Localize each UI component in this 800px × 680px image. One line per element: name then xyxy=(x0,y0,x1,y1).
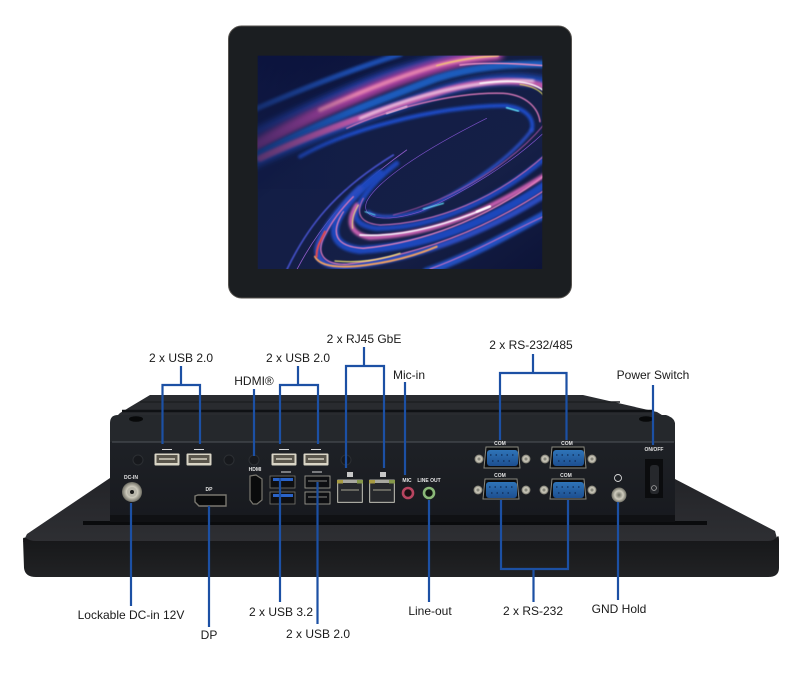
callout: USB 3.2: 2 x USB 3.2 xyxy=(249,605,313,619)
callout: Power Switch xyxy=(617,368,689,445)
callout: RJ45 xyxy=(327,332,401,468)
callout: HDMI xyxy=(234,374,274,456)
chassis recess left xyxy=(129,416,143,422)
tiny silkscreen labels: DP xyxy=(206,487,213,493)
chassis ridge xyxy=(122,410,652,412)
port: RJ45 A xyxy=(337,480,363,503)
chassis front face xyxy=(110,442,675,516)
callout: RS-232: 2 x RS-232 xyxy=(503,604,563,618)
callout: Mic-in: Mic-in xyxy=(393,368,425,382)
callout: GND Hold: GND Hold xyxy=(592,602,646,616)
callout: 2 x USB 2.0 left: 2 x USB 2.0 xyxy=(149,351,213,365)
callout: Line-out xyxy=(408,500,452,618)
tiny silkscreen labels: HDMI xyxy=(249,467,262,473)
callout: RJ45: 2 x RJ45 GbE xyxy=(327,332,401,346)
chassis upper face xyxy=(110,415,675,442)
tiny silkscreen labels xyxy=(124,441,663,493)
tiny silkscreen labels: COM xyxy=(494,473,506,479)
chassis lower lip xyxy=(110,515,675,522)
chassis top xyxy=(110,395,675,440)
tiny silkscreen labels: ON/OFF xyxy=(645,447,663,453)
callout: RS-232 xyxy=(501,500,568,618)
callout: DP xyxy=(201,506,217,642)
port: COM bottom right xyxy=(540,479,596,499)
callout: Line-out: Line-out xyxy=(408,604,452,618)
port: COM top left xyxy=(474,447,530,468)
callout: DP: DP xyxy=(201,628,217,642)
chassis top ridge xyxy=(140,401,620,403)
port: USB 3.2 pair xyxy=(270,476,295,504)
port: COM bottom left xyxy=(474,479,530,499)
mounting panel top surface xyxy=(23,478,778,542)
port: line-out jack xyxy=(424,488,434,498)
mounting panel front edge xyxy=(23,536,779,577)
monitor: front view xyxy=(228,26,572,298)
power switch xyxy=(645,459,663,498)
callout: 2 x USB 2.0 middle: 2 x USB 2.0 xyxy=(266,351,330,365)
callout: Mic-in xyxy=(393,368,425,475)
port: COM top right xyxy=(540,447,596,468)
port: USB 2.0 B xyxy=(186,454,212,466)
ground screw xyxy=(612,488,626,502)
callout: RS-232/485 xyxy=(489,338,573,440)
port: USB 2.0 C xyxy=(272,454,296,466)
panel PC: rear I/O view xyxy=(23,395,779,577)
callout: 2 x USB 2.0 left xyxy=(149,351,213,444)
callout: 2 x USB 2.0 middle xyxy=(266,351,330,444)
callout: USB 2.0 lower: 2 x USB 2.0 xyxy=(286,627,350,641)
tiny silkscreen labels: COM xyxy=(561,441,573,447)
port: DisplayPort xyxy=(195,495,226,506)
tiny silkscreen labels: COM xyxy=(560,473,572,479)
callout: GND Hold xyxy=(592,502,646,616)
callout: RS-232/485: 2 x RS-232/485 xyxy=(489,338,573,352)
chassis recess right xyxy=(639,416,653,422)
port: HDMI xyxy=(250,475,262,504)
tiny silkscreen labels: COM xyxy=(494,441,506,447)
callout: DC-in: Lockable DC-in 12V xyxy=(78,608,184,622)
USB symbols xyxy=(162,450,322,472)
tiny silkscreen labels: MIC xyxy=(402,478,412,484)
chassis seam xyxy=(112,441,674,443)
tiny silkscreen labels: LINE OUT xyxy=(417,478,441,484)
screen wallpaper xyxy=(253,52,548,272)
callout: HDMI: HDMI® xyxy=(234,374,274,388)
port: RJ45 B xyxy=(369,480,395,503)
panel screws xyxy=(133,455,351,465)
mounting bracket strip xyxy=(83,521,707,525)
port: USB 2.0 A xyxy=(154,454,180,466)
callout: DC-in xyxy=(78,503,184,622)
port: USB 2.0 D xyxy=(304,454,328,466)
callout: Power Switch: Power Switch xyxy=(617,368,689,382)
ground symbol xyxy=(614,474,622,482)
monitor bezel xyxy=(228,26,572,298)
port: USB 2.0 pair lower xyxy=(305,476,330,504)
port: mic jack xyxy=(403,488,413,498)
port: DC-in xyxy=(122,482,142,502)
tiny silkscreen labels: DC-IN xyxy=(124,475,138,481)
LAN symbols xyxy=(347,472,386,477)
